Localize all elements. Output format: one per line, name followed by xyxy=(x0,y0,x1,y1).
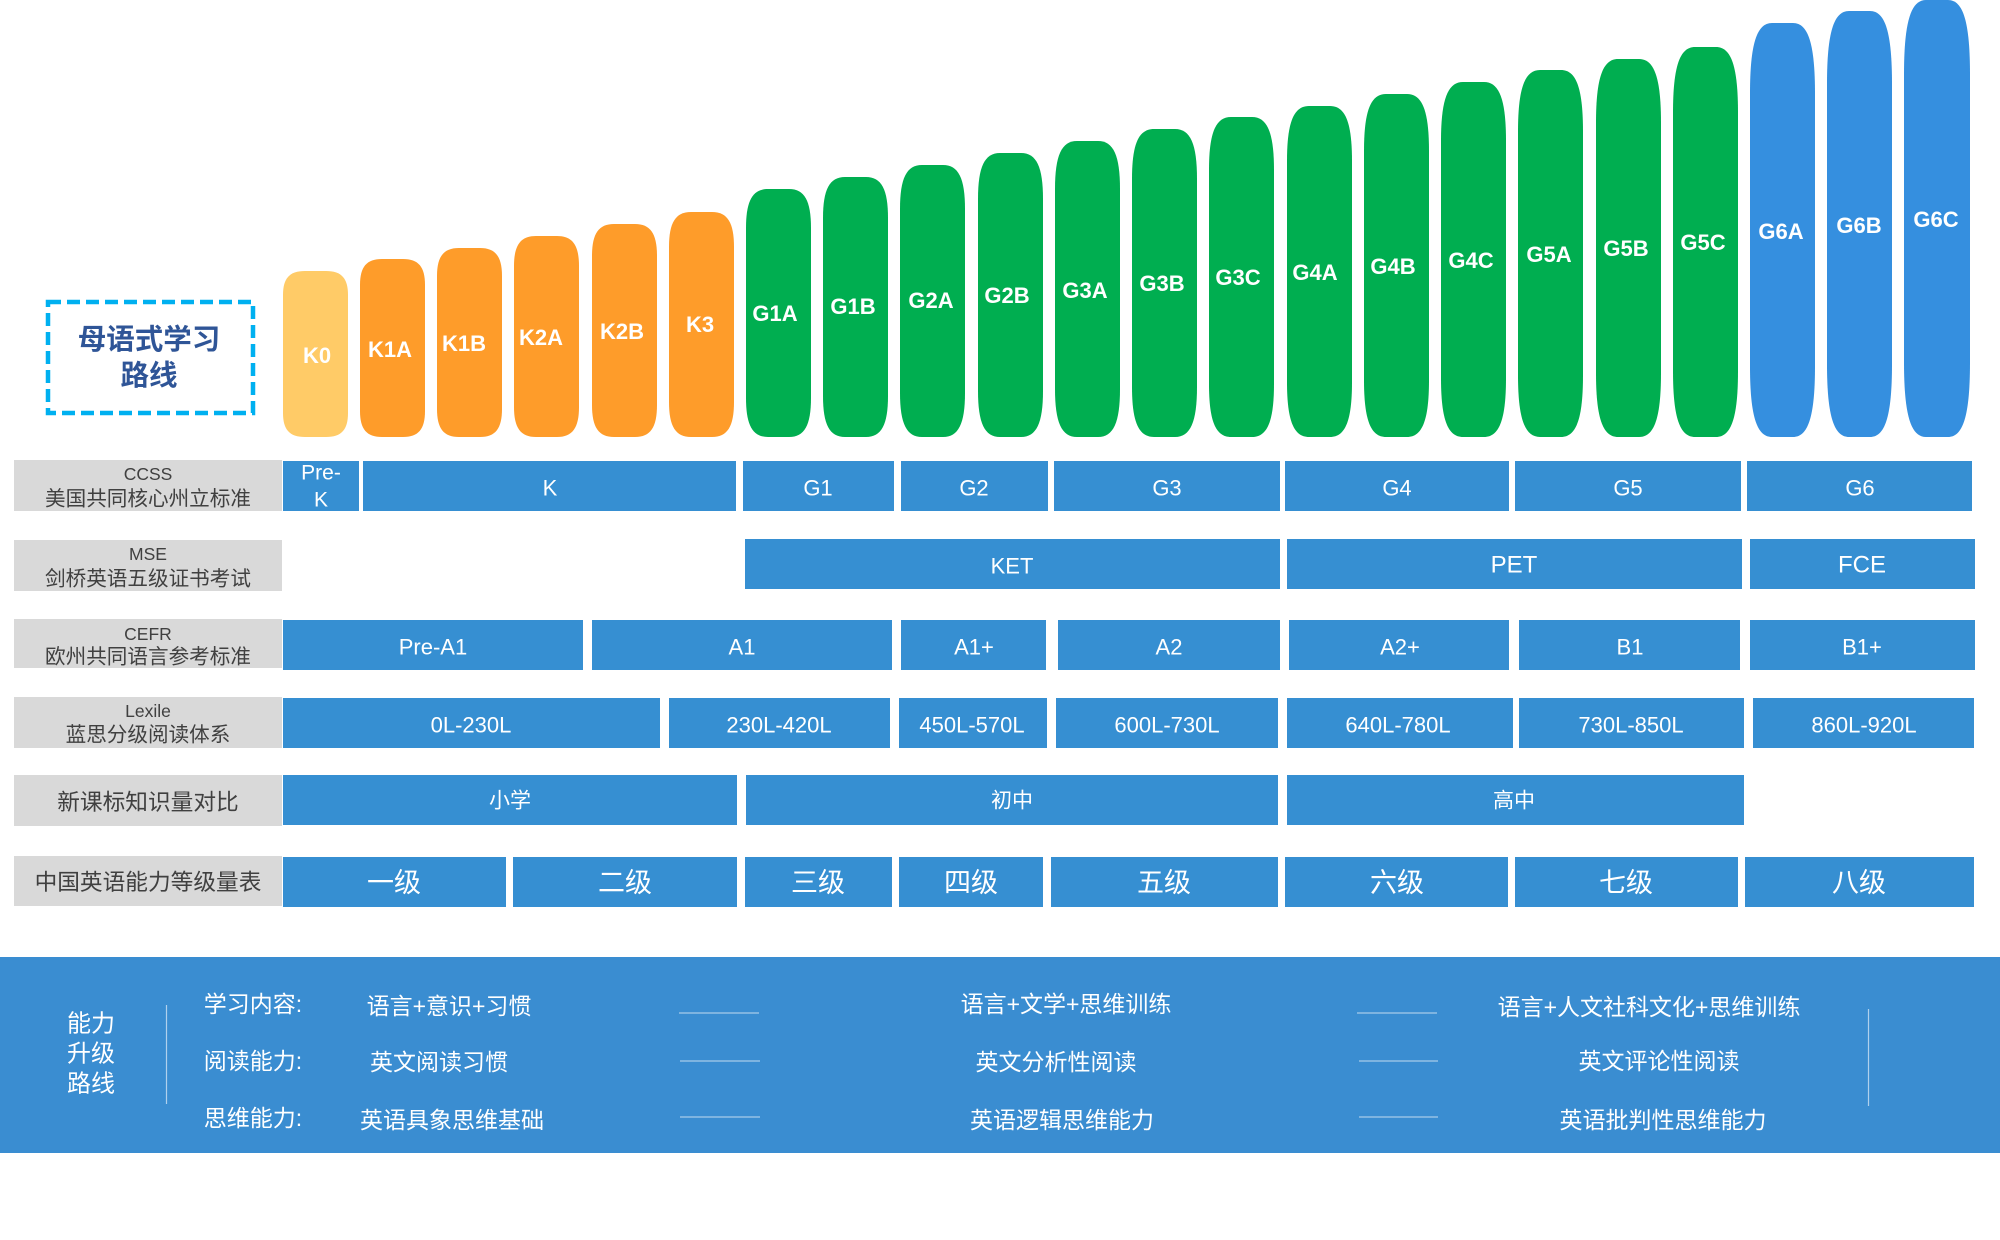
cell 八级 xyxy=(1745,857,1974,907)
title box: 母语式学习路线: 路线 xyxy=(120,360,178,392)
pill G6C: G6C xyxy=(1913,207,1959,232)
cell G6 xyxy=(1747,461,1972,511)
cell 七级 xyxy=(1515,857,1738,907)
cell G6: G6 xyxy=(1845,476,1875,500)
cell 三级: 三级 xyxy=(791,868,845,898)
cell A1+ xyxy=(901,620,1046,670)
row label: 新课标知识量对比 xyxy=(14,775,282,826)
pill G6B xyxy=(1827,11,1892,437)
panel heading: 能力 xyxy=(67,1010,115,1038)
pill K0: K0 xyxy=(303,343,331,368)
cell 730L-850L: 730L-850L xyxy=(1578,712,1684,738)
pill G1A xyxy=(746,189,811,437)
cell 450L-570L: 450L-570L xyxy=(919,712,1025,738)
cell K xyxy=(363,461,736,511)
pill G3B: G3B xyxy=(1139,271,1185,296)
cell A2+ xyxy=(1289,620,1509,670)
pill G4A: G4A xyxy=(1292,260,1338,285)
pill G6A xyxy=(1750,23,1815,437)
row label: CCSS: 美国共同核心州立标准 xyxy=(45,488,251,510)
cell 高中 xyxy=(1287,775,1744,825)
row: 阅读能力: 英文评论性阅读 xyxy=(1578,1048,1740,1074)
title box: 母语式学习路线 xyxy=(48,302,253,413)
cell G3: G3 xyxy=(1152,476,1182,500)
cell Pre-A1: Pre-A1 xyxy=(399,634,467,660)
row: 阅读能力: 阅读能力: xyxy=(204,1048,302,1074)
row: 思维能力: 思维能力: xyxy=(204,1105,302,1131)
cell 三级 xyxy=(745,857,892,907)
cell A1 xyxy=(592,620,892,670)
pill K2A: K2A xyxy=(519,325,563,350)
pill G3C: G3C xyxy=(1215,265,1261,290)
pill G4C xyxy=(1441,82,1506,437)
level pills xyxy=(283,0,1970,437)
cell Pre-A1 xyxy=(283,620,583,670)
cell 600L-730L xyxy=(1056,698,1278,748)
cell G2 xyxy=(901,461,1048,511)
cell 五级 xyxy=(1051,857,1278,907)
pill G3A xyxy=(1055,141,1120,437)
row label: CEFR xyxy=(14,619,282,668)
panel heading xyxy=(67,1010,115,1098)
row: CCSS xyxy=(14,460,1972,512)
pill G4B xyxy=(1364,94,1429,437)
cell 六级: 六级 xyxy=(1370,868,1424,898)
pill G1B xyxy=(823,177,888,437)
pill G5C xyxy=(1673,47,1738,437)
cell G5 xyxy=(1515,461,1741,511)
row label: MSE: 剑桥英语五级证书考试 xyxy=(45,568,251,590)
title box: 母语式学习路线: 母语式学习 xyxy=(78,324,220,356)
row: 阅读能力 xyxy=(204,1048,1740,1075)
pill K2A xyxy=(514,236,579,437)
cell 高中: 高中 xyxy=(1493,790,1535,812)
row: Lexile xyxy=(14,697,1974,748)
cell G3 xyxy=(1054,461,1280,511)
cell G4: G4 xyxy=(1382,476,1412,500)
cell FCE: FCE xyxy=(1838,552,1886,578)
cell 二级: 二级 xyxy=(598,868,652,898)
pill G3C xyxy=(1209,117,1274,437)
cell 0L-230L: 0L-230L xyxy=(431,712,511,738)
pill K3 xyxy=(669,212,734,437)
cell 640L-780L: 640L-780L xyxy=(1345,712,1451,738)
pill G1B: G1B xyxy=(830,294,876,319)
cell 小学 xyxy=(283,775,737,825)
row label: Lexile: Lexile xyxy=(125,701,171,721)
row: 思维能力: 英语批判性思维能力 xyxy=(1560,1107,1766,1133)
cell 一级: 一级 xyxy=(367,868,421,898)
cell B1: B1 xyxy=(1617,634,1643,660)
cell 五级: 五级 xyxy=(1137,868,1191,898)
cell G2: G2 xyxy=(959,476,989,500)
pill G5A xyxy=(1518,70,1583,437)
row label: 中国英语能力等级量表 xyxy=(14,856,282,906)
cell B1 xyxy=(1519,620,1740,670)
cell G1 xyxy=(743,461,894,511)
cell Pre-K: Pre- xyxy=(301,462,341,484)
cell 二级 xyxy=(513,857,737,907)
cell 小学: 小学 xyxy=(489,790,531,812)
pill G6B: G6B xyxy=(1836,213,1882,238)
row: 学习内容: 语言+意识+习惯 xyxy=(367,993,531,1019)
pill G2B xyxy=(978,153,1043,437)
cell 860L-920L: 860L-920L xyxy=(1811,712,1917,738)
row: 新课标知识量对比 xyxy=(14,775,1744,826)
pill G5A: G5A xyxy=(1526,242,1572,267)
cell 230L-420L xyxy=(669,698,890,748)
cell A2 xyxy=(1058,620,1280,670)
pill G5B xyxy=(1596,59,1661,437)
row: 思维能力: 英语逻辑思维能力 xyxy=(970,1107,1154,1133)
row: 学习内容 xyxy=(204,991,1800,1020)
row: 中国英语能力等级量表 xyxy=(14,856,1974,907)
cell B1+: B1+ xyxy=(1842,634,1882,660)
row label: 新课标知识量对比: 新课标知识量对比 xyxy=(57,789,239,815)
cell 230L-420L: 230L-420L xyxy=(726,712,832,738)
row: 学习内容: 语言+人文社科文化+思维训练 xyxy=(1498,994,1800,1020)
pill G5B: G5B xyxy=(1603,236,1649,261)
cell G5: G5 xyxy=(1613,476,1643,500)
row: 学习内容: 语言+文学+思维训练 xyxy=(961,991,1171,1017)
cell 730L-850L xyxy=(1519,698,1744,748)
pill G5C: G5C xyxy=(1680,230,1726,255)
cell G4 xyxy=(1285,461,1509,511)
cell 一级 xyxy=(283,857,506,907)
pill K0 xyxy=(283,271,348,437)
cell PET: PET xyxy=(1491,552,1538,578)
cell K: K xyxy=(543,476,558,500)
cell G1: G1 xyxy=(803,476,833,500)
row: 学习内容: 学习内容: xyxy=(204,991,302,1017)
cell FCE xyxy=(1750,539,1975,589)
row label: CEFR: 欧州共同语言参考标准 xyxy=(45,646,251,668)
row: 阅读能力: 英文分析性阅读 xyxy=(976,1049,1136,1075)
pill G6C xyxy=(1904,0,1970,437)
cell 六级 xyxy=(1285,857,1508,907)
cell A1: A1 xyxy=(729,634,755,660)
cell A2+: A2+ xyxy=(1380,634,1420,660)
cell PET xyxy=(1287,539,1742,589)
pill G1A: G1A xyxy=(752,301,798,326)
cell 0L-230L xyxy=(283,698,660,748)
pill G2A: G2A xyxy=(908,288,954,313)
row: 思维能力 xyxy=(204,1105,1766,1133)
row label: Lexile: 蓝思分级阅读体系 xyxy=(66,724,230,746)
cell 初中: 初中 xyxy=(991,790,1033,812)
row label: CEFR: CEFR xyxy=(124,624,172,644)
panel: 能力升级路线 xyxy=(0,957,2000,1153)
cell 四级: 四级 xyxy=(944,868,998,898)
panel heading: 路线 xyxy=(67,1070,115,1098)
row: 思维能力: 英语具象思维基础 xyxy=(360,1107,544,1133)
cell 四级 xyxy=(899,857,1043,907)
pill K3: K3 xyxy=(686,312,714,337)
pill K1B xyxy=(437,248,502,437)
row: MSE xyxy=(14,539,1975,591)
pill K2B xyxy=(592,224,657,437)
pill G4B: G4B xyxy=(1370,254,1416,279)
cell 450L-570L xyxy=(899,698,1047,748)
cell Pre-K: K xyxy=(314,488,328,512)
pill K1B: K1B xyxy=(442,331,486,356)
row: 阅读能力: 英文阅读习惯 xyxy=(370,1049,508,1075)
row label: MSE xyxy=(14,540,282,591)
cell KET xyxy=(745,539,1280,589)
pill G3A: G3A xyxy=(1062,278,1108,303)
pill G6A: G6A xyxy=(1758,219,1804,244)
cell 860L-920L xyxy=(1753,698,1974,748)
row: CEFR xyxy=(14,619,1975,670)
pill G2A xyxy=(900,165,965,437)
cell 八级: 八级 xyxy=(1832,868,1886,898)
pill G4A xyxy=(1287,106,1352,437)
cell 640L-780L xyxy=(1287,698,1513,748)
cell 七级: 七级 xyxy=(1599,868,1653,898)
cell A2: A2 xyxy=(1156,634,1182,660)
pill K1A: K1A xyxy=(368,337,412,362)
row label: CCSS xyxy=(14,460,282,511)
pill G4C: G4C xyxy=(1448,248,1494,273)
cell KET: KET xyxy=(991,554,1033,578)
cell 初中 xyxy=(746,775,1278,825)
row label: CCSS: CCSS xyxy=(124,464,172,484)
pill G3B xyxy=(1132,129,1197,437)
panel heading: 升级 xyxy=(67,1040,115,1068)
cell Pre-K xyxy=(283,461,359,512)
pill K1A xyxy=(360,259,425,437)
row label: MSE: MSE xyxy=(129,544,167,564)
row label: Lexile xyxy=(14,697,282,748)
cell B1+ xyxy=(1750,620,1975,670)
row label: 中国英语能力等级量表: 中国英语能力等级量表 xyxy=(35,869,261,895)
pill G2B: G2B xyxy=(984,283,1030,308)
pill K2B: K2B xyxy=(600,319,644,344)
cell 600L-730L: 600L-730L xyxy=(1114,712,1220,738)
cell A1+: A1+ xyxy=(954,634,994,660)
